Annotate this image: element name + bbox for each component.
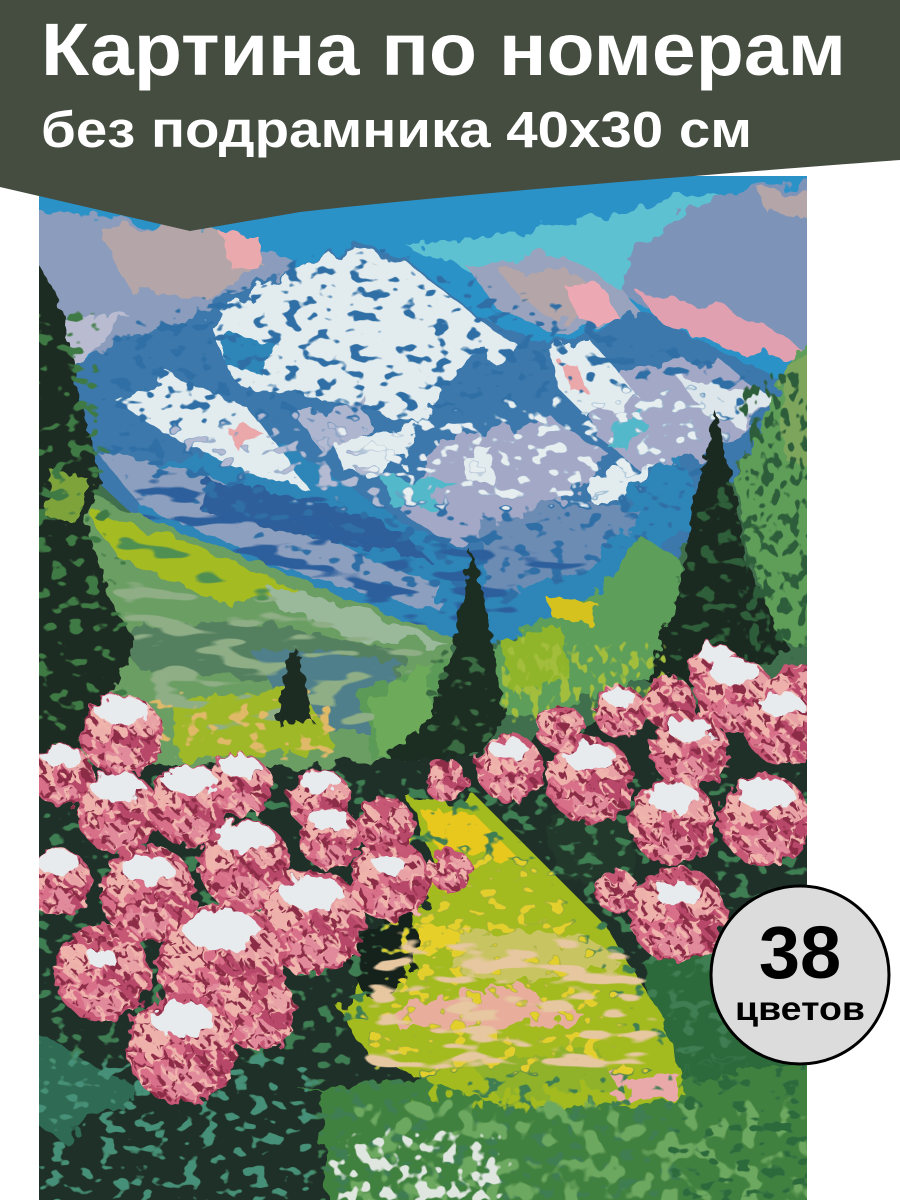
sky and clouds	[39, 176, 807, 396]
badge: 38 colours	[711, 886, 889, 1064]
right forest and centre fir	[370, 340, 815, 770]
foreground meadow path	[30, 680, 820, 1200]
badge number: 38	[759, 911, 841, 994]
valley brush strokes	[112, 536, 424, 761]
meadow and foliage speckle	[39, 770, 807, 1200]
dark trees left	[30, 250, 312, 760]
snow and shadow brush strokes	[99, 248, 745, 625]
subtitle: без подрамника 40х30 см	[41, 101, 752, 158]
badge label: цветов	[735, 990, 865, 1027]
banner	[0, 0, 900, 231]
painting	[39, 176, 807, 1200]
peony flowers	[24, 644, 821, 1103]
title: Картина по номерам	[41, 8, 846, 91]
tree foliage speckle	[0, 300, 830, 780]
snow mountains	[50, 240, 790, 650]
green valley slope	[80, 494, 453, 772]
